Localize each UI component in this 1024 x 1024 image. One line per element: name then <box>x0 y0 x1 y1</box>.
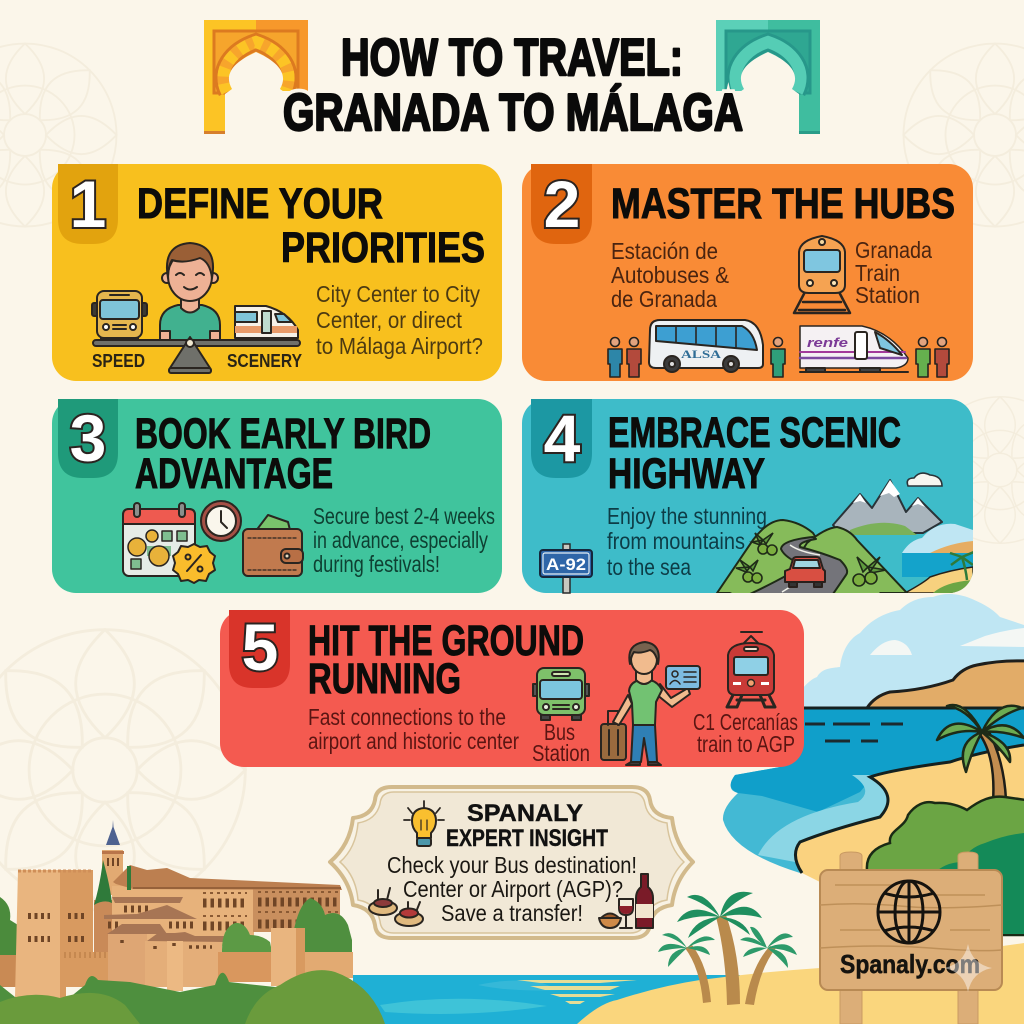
wave dashes <box>805 724 903 741</box>
number: 3 <box>70 401 106 475</box>
scene: Alhambra palace <box>0 820 385 1024</box>
tower windows <box>28 916 86 939</box>
shallow water <box>758 775 888 862</box>
bus station text <box>611 238 729 312</box>
palace shaded wing <box>253 886 340 932</box>
big tower light face <box>15 870 60 1003</box>
green hill left <box>0 993 140 1024</box>
shaft under cypress <box>94 900 112 960</box>
train station text: Station <box>855 282 920 308</box>
icon: calendar <box>123 503 195 576</box>
left block windows <box>108 909 197 925</box>
panel: step 1 define your priorities <box>52 164 502 381</box>
card background <box>522 399 973 593</box>
panel: step 2 master the hubs <box>522 164 973 381</box>
mandala pattern: right middle <box>927 397 1024 543</box>
gate windows <box>122 940 212 950</box>
body text: during festivals! <box>313 551 440 577</box>
card background <box>220 610 804 767</box>
left trees <box>0 897 18 955</box>
website text: Spanaly.com <box>840 949 980 979</box>
heading: DEFINE YOUR <box>137 180 383 228</box>
icon: front train <box>794 236 850 313</box>
dark vegetation <box>0 973 345 1024</box>
second roof <box>112 897 183 903</box>
bus station text: Autobuses & <box>611 262 729 288</box>
heading: ADVANTAGE <box>135 450 333 498</box>
number: 5 <box>242 610 278 684</box>
palace tall windows <box>203 902 338 926</box>
body text: Fast connections to the <box>308 704 506 730</box>
number badge <box>531 164 592 244</box>
inset sea <box>902 553 973 577</box>
title: HOW TO TRAVEL: <box>341 29 683 87</box>
ALSA logo: ALSA <box>681 347 721 361</box>
right wall <box>305 952 353 978</box>
icon: green bus <box>533 668 589 720</box>
heading <box>137 180 485 272</box>
wood grain <box>820 885 1002 951</box>
road markings <box>782 545 820 592</box>
mandala pattern: top right <box>904 44 1024 226</box>
body text <box>316 281 483 359</box>
sparkle <box>944 944 992 992</box>
large palm <box>937 705 1024 802</box>
scene: beach on the right <box>723 594 1024 935</box>
icon: tapas <box>369 888 423 926</box>
bell tower band <box>102 851 124 854</box>
label: bus station: Station <box>532 740 590 766</box>
icon: right horseshoe arch <box>714 20 820 135</box>
left green hill <box>716 519 816 593</box>
people group right <box>916 338 949 377</box>
road <box>750 537 847 594</box>
train station text <box>855 237 932 308</box>
green hill right <box>245 970 385 1024</box>
right trees <box>293 898 352 955</box>
olive branch 1 <box>752 533 777 555</box>
heading <box>446 800 608 852</box>
body text: Secure best 2-4 weeks <box>313 503 495 529</box>
right green hill <box>803 526 908 593</box>
title <box>283 29 743 142</box>
right palm fronds <box>740 927 797 968</box>
title: GRANADA TO MÁLAGA <box>283 84 743 142</box>
inset green <box>933 580 973 593</box>
body text: Check your Bus destination! <box>387 852 637 878</box>
tower crenellations <box>18 870 93 872</box>
panel: step 3 book early bird advantage <box>52 399 502 593</box>
bus station text: Estación de <box>611 238 718 264</box>
body text <box>387 852 637 926</box>
body text: Center or Airport (AGP)? <box>403 876 623 902</box>
white cloud puffs <box>870 628 1024 655</box>
inset cloud <box>902 524 973 553</box>
lower block <box>108 934 147 987</box>
icon: wine glass <box>619 899 633 928</box>
sea horizon <box>780 706 1024 710</box>
number badge <box>58 164 118 244</box>
right tower <box>271 928 305 986</box>
olive branch 2 <box>736 560 762 583</box>
left wall <box>0 955 18 987</box>
mandala pattern: left <box>0 630 245 910</box>
train station text: Train <box>855 260 900 286</box>
body text: in advance, especially <box>313 527 488 553</box>
icon: road sign A-92: A-92 <box>546 555 586 574</box>
body text <box>308 704 519 754</box>
palm group <box>658 892 797 1005</box>
icon: wine bottle <box>636 874 653 928</box>
body text: to Málaga Airport? <box>316 333 483 359</box>
number badge <box>229 610 290 688</box>
body text: Center, or direct <box>316 307 463 333</box>
seesaw <box>93 337 300 373</box>
inset hill <box>930 541 973 553</box>
scene: lower beach and sea <box>353 943 1024 1024</box>
distant green <box>850 523 917 535</box>
body text: Enjoy the stunning <box>607 503 767 529</box>
sky cloud <box>790 594 1024 712</box>
body text <box>607 503 767 580</box>
sign: Spanaly.com <box>820 852 1002 1024</box>
gate tower <box>167 941 183 991</box>
light water lobe <box>723 767 870 873</box>
center palm fronds <box>677 892 762 938</box>
number: 4 <box>544 401 581 475</box>
number badge <box>531 399 592 478</box>
number: 1 <box>70 167 106 241</box>
heading: PRIORITIES <box>281 224 485 272</box>
people group left <box>608 338 641 377</box>
icon: red commuter train <box>727 632 775 707</box>
title: GRANADA TO MÁLAGA <box>283 84 743 142</box>
body text: to the sea <box>607 554 691 580</box>
card background <box>52 164 502 381</box>
palm trunks <box>685 915 776 1005</box>
bus station text: de Granada <box>611 286 717 312</box>
icon: bus <box>92 291 147 343</box>
icon: traveller with suitcase and ID <box>601 642 700 765</box>
icon: lightbulb <box>404 801 444 846</box>
renfe logo: renfe <box>807 335 848 350</box>
inner border <box>340 792 684 933</box>
palace windows <box>203 892 338 916</box>
bell tower <box>102 850 123 895</box>
hills <box>867 661 1024 708</box>
cypress <box>94 860 112 905</box>
car <box>785 557 825 587</box>
heading <box>135 410 431 498</box>
heading: EMBRACE SCENIC <box>608 409 901 457</box>
palace roof <box>113 865 342 890</box>
heading: SPANALY <box>467 800 583 827</box>
icon: left horseshoe arch <box>204 20 310 135</box>
heading: EXPERT INSIGHT <box>446 825 608 852</box>
sand <box>577 943 1024 1024</box>
icon: clock <box>201 501 241 541</box>
heading: BOOK EARLY BIRD <box>135 410 431 458</box>
deep sea <box>731 708 1024 812</box>
card background <box>522 164 973 381</box>
label: scenery: SCENERY <box>227 351 302 371</box>
icon: person <box>160 243 220 340</box>
fourth roof <box>107 924 167 934</box>
label: C1 train: train to AGP <box>697 731 795 757</box>
mandala pattern: top left <box>0 44 116 226</box>
dark bush <box>932 833 1024 934</box>
sand <box>795 745 1024 882</box>
inset palm <box>950 552 974 580</box>
body text: Save a transfer! <box>441 900 583 926</box>
corbelled wall <box>60 952 120 987</box>
fifth roof <box>147 932 224 942</box>
body text: airport and historic center <box>308 728 519 754</box>
icon: globe <box>878 881 940 943</box>
low wall <box>218 952 274 982</box>
sign posts <box>840 852 978 1024</box>
label: bus station: Bus <box>544 719 575 745</box>
icon: ALSA coach <box>649 320 763 372</box>
icon: renfe train <box>800 326 908 372</box>
icon: food bowl <box>599 914 621 928</box>
upper wave <box>478 981 560 990</box>
trees in middle <box>222 923 272 952</box>
card background <box>52 399 502 593</box>
heading: RUNNING <box>308 655 461 703</box>
body text: from mountains <box>607 528 745 554</box>
heading <box>608 409 901 498</box>
icon: road sign A-92 <box>540 544 592 593</box>
person middle <box>771 338 785 377</box>
bell windows <box>108 858 118 866</box>
icon: wallet <box>243 515 303 576</box>
third roof <box>104 905 197 919</box>
tower corbel band <box>64 952 108 958</box>
thin cypress <box>127 866 131 890</box>
light wave <box>380 999 547 1014</box>
sign board <box>820 870 1002 990</box>
label: C1 train <box>693 709 798 757</box>
big tower shaded face <box>60 870 93 1003</box>
small cloud <box>907 473 942 486</box>
left palm fronds <box>658 933 715 967</box>
heading: HIT THE GROUND <box>308 617 584 665</box>
inset beach <box>905 567 973 593</box>
body text <box>313 503 495 577</box>
label: speed: SPEED <box>92 351 145 371</box>
panel: step 4 embrace scenic highway <box>522 399 974 594</box>
sea band <box>353 975 740 1024</box>
label: C1 train: C1 Cercanías <box>693 709 798 735</box>
banner frame <box>330 787 693 938</box>
icon: train <box>235 306 298 338</box>
label: bus station <box>532 719 590 766</box>
bush <box>867 797 1024 935</box>
bell tower roof <box>106 820 120 845</box>
snow caps <box>853 480 925 507</box>
right tower side <box>296 928 305 986</box>
body text: City Center to City <box>316 281 480 307</box>
hill fill <box>730 592 880 593</box>
panel: step 5 hit the ground running <box>220 610 804 767</box>
middle lower block <box>145 941 222 987</box>
train station text: Granada <box>855 237 932 263</box>
icon: percent badge <box>173 544 215 583</box>
roof dark band <box>133 887 341 889</box>
callout: Spanaly expert insight <box>330 787 693 938</box>
heading: HIGHWAY <box>608 450 765 498</box>
illustration: landscape <box>717 473 974 594</box>
palace main body <box>112 886 254 946</box>
heading <box>308 617 584 703</box>
olive branch 3 <box>853 557 886 586</box>
number: 2 <box>544 167 580 241</box>
number badge <box>58 399 118 478</box>
heading: MASTER THE HUBS <box>611 180 955 228</box>
mountains <box>833 480 942 533</box>
sun reflections <box>517 980 637 1004</box>
